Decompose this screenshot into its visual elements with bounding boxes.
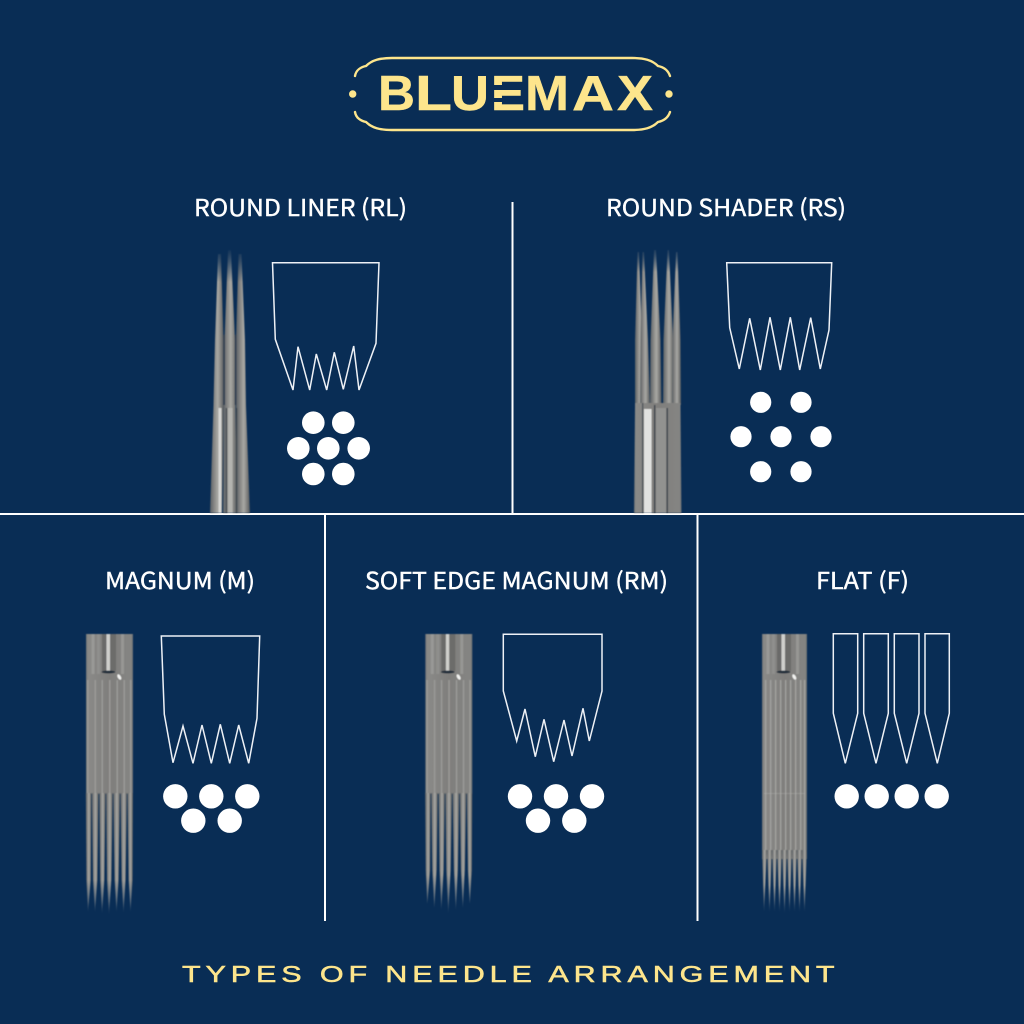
logo wordmark: L [415,67,452,121]
needle cross-section dots: soft edge magnum [508,784,604,833]
logo wordmark: E [491,67,525,121]
logo frame [355,58,670,130]
needle cross-section dots: round shader [730,392,832,482]
heading: soft edge magnum: SOFT EDGE MAGNUM (RM) [365,562,668,596]
needle photo: round liner [208,248,252,513]
needle tip diagram: round shader [727,263,832,370]
needle tip diagram: flat [833,634,949,763]
heading: round liner: ROUND LINER (RL) [194,189,407,223]
panel: round shader [606,189,846,513]
needle cross-section dots: flat [834,784,949,808]
logo wordmark: U [451,67,489,121]
needle photo: flat [760,634,809,916]
panel: flat [760,562,949,916]
heading: flat: FLAT (F) [816,562,909,596]
dividers [0,202,1024,921]
needle tip diagram: round liner [272,263,379,390]
logo wordmark: A [572,67,614,121]
logo wordmark: X [617,67,653,121]
needle tip diagram: soft edge magnum [503,634,602,762]
needle photo: round shader [632,246,683,513]
heading: round shader: ROUND SHADER (RS) [606,189,846,223]
needle photo: magnum [84,634,135,916]
logo dots [349,90,673,98]
heading: magnum: MAGNUM (M) [105,562,255,596]
logo wordmark: M [525,67,569,121]
needle photo: soft edge magnum [423,634,474,916]
footer title: TYPES OF NEEDLE ARRANGEMENT [182,960,835,987]
logo: Bluemax [349,58,673,130]
panel: round liner [194,189,407,513]
logo wordmark: B [378,67,415,121]
needle cross-section dots: round liner [287,411,370,485]
needle tip diagram: magnum [161,636,260,763]
panel: soft edge magnum [365,562,668,916]
needle cross-section dots: magnum [163,784,260,833]
panel: magnum [84,562,260,916]
